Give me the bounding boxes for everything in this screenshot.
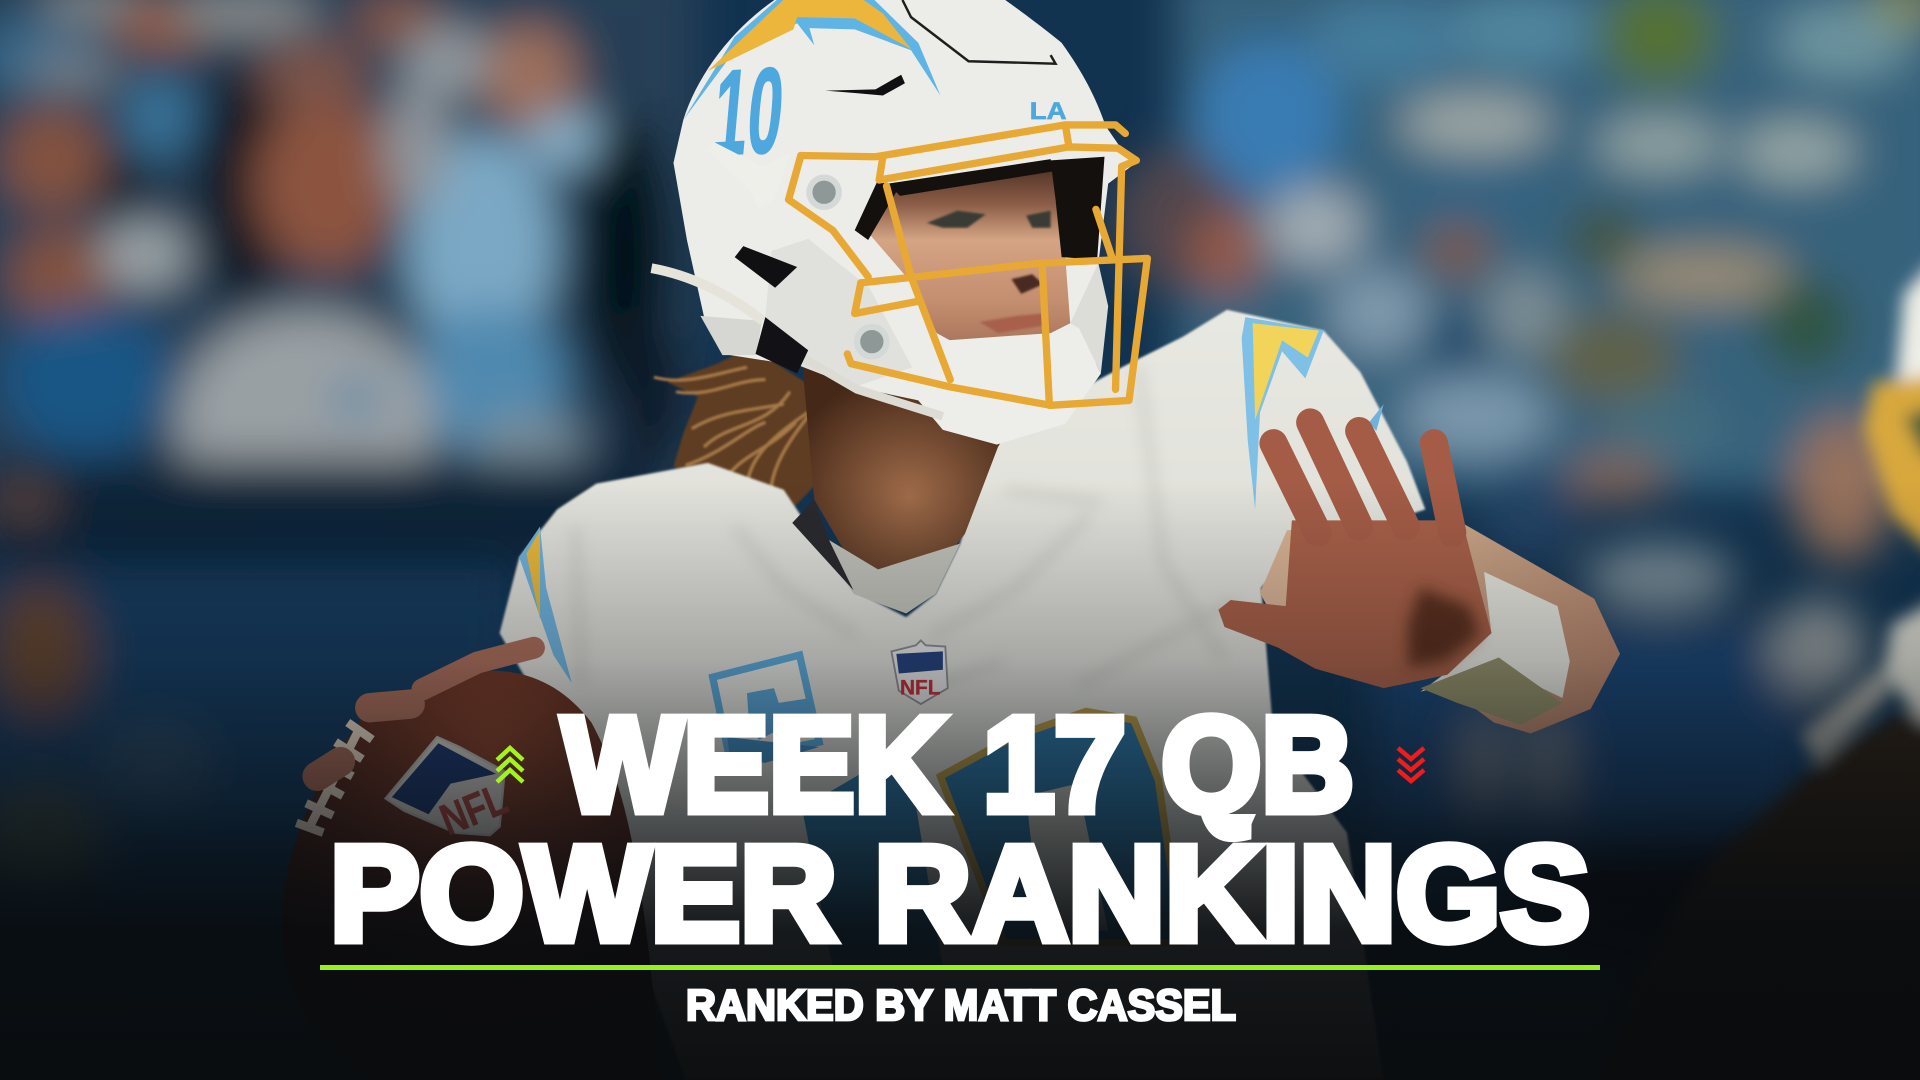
- upper arm skin behind hand: [1260, 527, 1347, 624]
- jersey torso: [500, 310, 1425, 1080]
- down chevrons: [1398, 748, 1424, 781]
- jersey number: [802, 711, 1182, 967]
- helmet number 10: 10: [708, 43, 789, 182]
- helmet: [651, 0, 1147, 444]
- helmet vents: [735, 75, 905, 288]
- chin strap: [651, 268, 763, 321]
- headline line one: WEEK 17 QB: [562, 689, 1354, 840]
- sleeve stripe: [1369, 404, 1384, 431]
- strap to chin: [802, 358, 943, 416]
- byline: RANKED BY MATT CASSEL: [686, 981, 1236, 1030]
- wrist tape: [1420, 572, 1570, 725]
- eyes: [927, 211, 1051, 228]
- forearm: [1445, 523, 1620, 733]
- gold facemask: [789, 125, 1147, 405]
- undershirt collar: [829, 540, 960, 613]
- hair: [654, 347, 834, 517]
- right cheek guard: [1070, 263, 1108, 373]
- Q tail: [1222, 814, 1256, 841]
- NFL jersey shield: [891, 640, 948, 704]
- green divider: [320, 965, 1600, 970]
- open hand: [1218, 422, 1491, 688]
- NFL shield on football: NFL: [434, 775, 514, 845]
- black clip: [756, 317, 808, 373]
- dark collar edge: [792, 500, 853, 590]
- nose and mouth: [980, 274, 1043, 333]
- face: [868, 163, 1070, 347]
- captain patch: [713, 655, 819, 759]
- crown hinge line: [902, 0, 1056, 64]
- shoulder stripes left: [519, 527, 572, 683]
- name tag: [727, 737, 819, 763]
- up chevrons: [497, 748, 523, 782]
- title block: [320, 689, 1600, 1030]
- foreground right: blurred teammate arm and mask: [1592, 233, 1920, 1080]
- ear pad: [700, 316, 762, 355]
- gripping fingers: [317, 648, 534, 776]
- dark bottom gradient overlay: [0, 480, 1920, 1080]
- NFL shield on football: [386, 737, 514, 845]
- LA logo: LA: [1030, 98, 1067, 125]
- football: [281, 671, 661, 1080]
- shoulder bolt right: [1242, 317, 1324, 509]
- visor bracket: [707, 142, 790, 208]
- neck: [802, 361, 1016, 569]
- headline line two: POWER RANKINGS: [330, 818, 1590, 969]
- player: Justin Herbert: [281, 0, 1620, 1080]
- jersey fold shadows: [576, 367, 1237, 686]
- bolt logo: [683, 0, 940, 120]
- helmet interior dark: [855, 157, 1104, 260]
- NFL jersey shield: NFL: [900, 676, 941, 699]
- helmet side shade: [765, 239, 912, 387]
- chin cup: [918, 328, 1101, 444]
- visor lenses: [809, 178, 887, 356]
